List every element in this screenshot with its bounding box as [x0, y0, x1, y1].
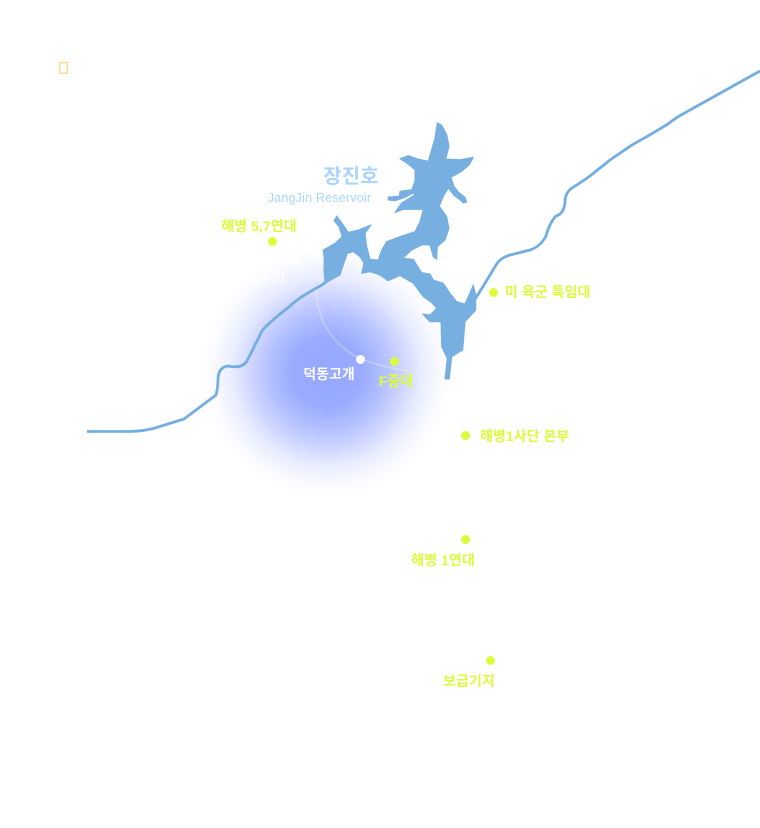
marker: supply base: 보급기지: [443, 673, 495, 689]
heading: lake name Korean: 장진호: [323, 165, 379, 188]
marker: Yudam-ri (faint): 유담리: [247, 270, 285, 286]
marker: Marine 1st Regiment: [411, 535, 475, 568]
glow: battle area: [202, 247, 452, 497]
river: west: [87, 279, 330, 432]
marker: Deokdong pass: [303, 355, 365, 382]
marker: Deokdong pass: 덕동고개: [303, 366, 355, 382]
route: faint line through Deokdong pass: [316, 290, 410, 371]
marker: Marine 1st Regiment: 해병 1연대: [411, 552, 475, 568]
marker: supply base: [443, 656, 495, 689]
river: northeast: [474, 71, 760, 301]
heading: lake name English: JangJin Reservoir: [268, 191, 371, 205]
icon: missing glyph box: [60, 63, 67, 73]
marker: F company: [379, 357, 413, 389]
lake: Jangjin Reservoir: [323, 123, 476, 379]
marker: Marine 1st Division HQ: 해병1사단 본부: [480, 428, 569, 444]
marker: F company: F중대: [379, 373, 413, 389]
marker: Marines 5th and 7th regiments: 해병 5,7연대: [221, 218, 297, 234]
marker: US Army special task force: 미 육군 특임대: [505, 284, 590, 300]
marker: Yudam-ri (faint): [247, 256, 300, 286]
marker: Marines 5th and 7th regiments: [221, 218, 297, 246]
